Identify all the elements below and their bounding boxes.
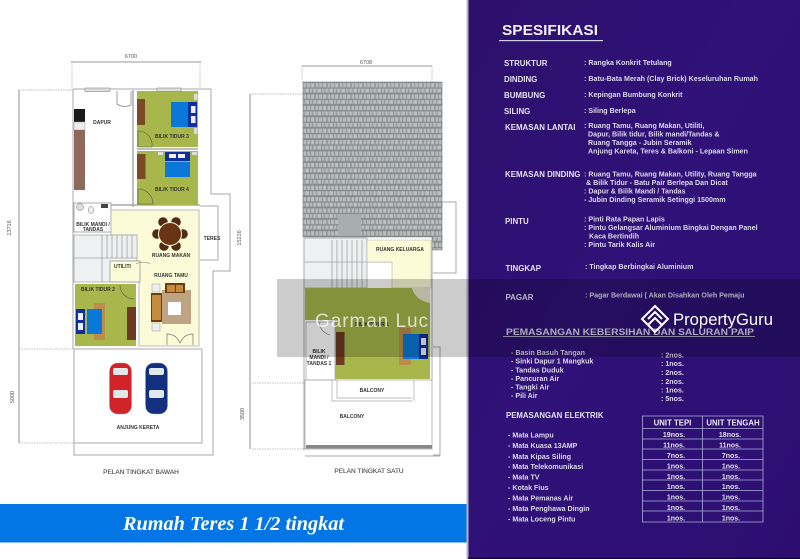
- spec: siling: [504, 107, 636, 116]
- room: bathroom: BILIK MANDI /: [76, 222, 110, 228]
- heading: pemasangan kebersihan: PEMASANGAN KEBERSIHAN DAN SALURAN PAIP: [506, 326, 754, 337]
- list: plumbing: : 2nos.: [661, 369, 684, 377]
- icon: blue car: [146, 363, 168, 414]
- spec: dinding: [504, 75, 758, 84]
- table: electrical units: 1nos.: [722, 484, 740, 491]
- watermark band: [277, 279, 800, 357]
- terrace outline: first floor: [433, 202, 456, 273]
- table: electrical units: 11nos.: [663, 442, 685, 450]
- list: plumbing: - Basin Basuh Tangan: [511, 349, 585, 357]
- spec: kemasan dinding: [505, 170, 757, 204]
- room: bedroom 4: BILIK TIDUR 4: [155, 187, 189, 193]
- table: electrical units: 7nos.: [722, 453, 740, 460]
- spec: kemasan dinding: : Dapur & Bilik Mandi / Tandas: [584, 188, 686, 196]
- spec: kemasan lantai: Ruang Tangga - Jubin Seramik: [588, 139, 692, 147]
- list: plumbing: : 5nos.: [661, 395, 684, 403]
- plan title: first floor: PELAN TINGKAT SATU: [334, 468, 404, 475]
- watermark: agent name: Garman Luc: [315, 311, 428, 332]
- room: bathroom first floor: BILIK: [312, 349, 326, 355]
- list: electrical: - Mata Pemanas Air: [508, 494, 573, 502]
- watermark: PropertyGuru logo: [642, 306, 773, 332]
- room: bedroom 3: BILIK TIDUR 3: [155, 134, 189, 140]
- outer boundary walls: [73, 89, 230, 455]
- spec: kemasan lantai: KEMASAN LANTAI: [505, 123, 575, 132]
- wall outline left: [72, 89, 74, 349]
- list: electrical: - Mata Loceng Pintu: [508, 516, 575, 524]
- list: electrical: - Mata Telekomunikasi: [508, 463, 583, 471]
- list: plumbing: : 1nos.: [661, 360, 684, 368]
- room: staircase first floor: [304, 238, 392, 288]
- room: bathroom first floor: TANDAS 1: [307, 361, 332, 367]
- spec: pintu: Kaca Bertindih: [589, 232, 639, 240]
- spec: bumbung: BUMBUNG: [504, 91, 545, 100]
- table: electrical units: 7nos.: [667, 453, 685, 460]
- dimension lines: first floor: 6708: [360, 60, 372, 66]
- icon: stacked diamonds: [642, 306, 668, 332]
- spec: pagar: [506, 292, 744, 302]
- table: electrical units: 18nos.: [719, 432, 741, 439]
- list: plumbing: : 2nos.: [661, 378, 684, 386]
- panel: ground floor plan: [7, 54, 243, 476]
- spec: siling: SILING: [504, 107, 530, 116]
- table: electrical units: 1nos.: [722, 505, 740, 512]
- spec: pagar: PAGAR: [506, 293, 534, 302]
- table: electrical units: [642, 416, 763, 522]
- list: plumbing: [511, 349, 684, 403]
- spec: tingkap: [506, 263, 693, 273]
- heading: pemasangan elektrik: PEMASANGAN ELEKTRIK: [506, 411, 604, 420]
- table: electrical units: 1nos.: [667, 464, 685, 470]
- spec: pintu: : Pintu Gelangsar Aluminium Bingkai Dengan Panel: [584, 224, 758, 232]
- spec: kemasan dinding: : Ruang Tamu, Ruang Makan, Utility, Ruang Tangga: [584, 170, 757, 178]
- balcony lower: BALCONY: [340, 414, 365, 420]
- panel: specification: [466, 0, 800, 559]
- room: bathroom first floor: [306, 322, 335, 380]
- dimension lines: first floor: [240, 60, 432, 449]
- list: plumbing: - Sinki Dapur 1 Mangkuk: [511, 358, 593, 366]
- balcony upper: BALCONY: [360, 388, 385, 394]
- room: ruang keluarga: [367, 240, 431, 288]
- balcony lower: [305, 380, 432, 449]
- room: bathroom: TANDAS: [83, 227, 104, 233]
- list: plumbing: : 2nos.: [661, 352, 684, 360]
- spec: siling: : Siling Berlepa: [584, 107, 636, 115]
- room: ruang keluarga: RUANG KELUARGA: [376, 247, 424, 253]
- title banner: [0, 504, 470, 542]
- list: electrical: - Mata Kipas Siling: [508, 453, 571, 461]
- table: electrical units: UNIT TENGAH: [706, 418, 760, 428]
- room: bedroom 2: [75, 284, 136, 346]
- room: car porch: ANJUNG KERETA: [117, 425, 160, 431]
- heading: spesifikasi: SPESIFIKASI: [502, 23, 598, 39]
- dimension lines: ground floor: 6700: [125, 54, 137, 60]
- list: plumbing: - Pancuran Air: [511, 375, 559, 383]
- roof tiles: [303, 82, 442, 250]
- terrace outline: [200, 206, 218, 260]
- spec: bumbung: : Kepingan Bumbung Konkrit: [584, 91, 683, 99]
- spec: dinding: DINDING: [504, 75, 537, 84]
- dimension lines: ground floor: [7, 54, 243, 443]
- room: bedroom 2: BILIK TIDUR 2: [81, 287, 115, 293]
- spec: kemasan lantai: Anjung Kareta, Teres & Balkoni - Lepaan Simen: [588, 148, 748, 156]
- spec: kemasan dinding: - Jubin Dinding Seramik Setinggi 1500mm: [584, 196, 726, 204]
- room: kitchen: [74, 88, 133, 205]
- spec: kemasan lantai: Dapur, Bilik tidur, Bilik mandi/Tandas &: [588, 130, 720, 138]
- spec: pagar: : Pagar Berdawai ( Akan Disahkan Oleh Pemaju: [585, 292, 744, 300]
- plan title: ground floor: PELAN TINGKAT BAWAH: [103, 469, 179, 476]
- spec: kemasan lantai: [505, 122, 748, 156]
- label: ruang tamu: RUANG TAMU: [154, 273, 188, 279]
- watermark: PropertyGuru logo: PropertyGuru: [673, 310, 773, 329]
- table: electrical units: 1nos.: [667, 494, 685, 502]
- table: electrical units: 1nos.: [722, 464, 740, 470]
- spec: kemasan lantai: : Ruang Tamu, Ruang Makan, Utiliti,: [584, 122, 704, 130]
- dimension lines: first floor: 3500: [240, 408, 246, 420]
- spec: pintu: : Pinti Rata Papan Lapis: [584, 216, 665, 224]
- room: car porch: [74, 349, 202, 443]
- spec: struktur: STRUKTUR: [504, 59, 548, 68]
- dimension lines: ground floor: 5000: [10, 391, 16, 403]
- list: electrical: - Kotak Fius: [508, 484, 549, 492]
- label: teres: TERES: [204, 236, 221, 242]
- spec: pintu: : Pintu Tarik Kalis Air: [584, 241, 655, 249]
- dimension lines: ground floor: 13716: [7, 220, 13, 236]
- list: plumbing: : 1nos.: [661, 386, 684, 394]
- spec: struktur: : Rangka Konkrit Tetulang: [584, 59, 672, 67]
- table: electrical units: 19nos.: [663, 432, 685, 439]
- title banner: Rumah Teres 1 1/2 tingkat: [122, 514, 345, 535]
- room: utility: UTILITI: [114, 264, 132, 270]
- list: electrical: - Mata Penghawa Dingin: [508, 505, 590, 513]
- list: electrical: [508, 432, 590, 524]
- list: electrical: - Mata TV: [508, 474, 540, 482]
- dining table: [152, 217, 188, 251]
- spec: kemasan dinding: & Bilik Tidur - Batu Pair Berlepa Dan Dicat: [586, 179, 728, 187]
- room: bathroom first floor: MANDI /: [309, 355, 329, 361]
- spec: bumbung: [504, 91, 683, 100]
- walls: first floor: [304, 238, 432, 450]
- spec: struktur: [504, 59, 672, 68]
- living room furniture: [151, 283, 193, 345]
- table: electrical units: 1nos.: [722, 494, 740, 502]
- roof skylight: [338, 214, 361, 236]
- spec: kemasan dinding: KEMASAN DINDING: [505, 170, 580, 179]
- list: plumbing: - Tandas Duduk: [511, 366, 564, 374]
- room: staircase: [74, 235, 137, 282]
- room: bathroom: [74, 203, 111, 233]
- table: electrical units: 1nos.: [667, 484, 685, 491]
- spec: tingkap: TINGKAP: [506, 264, 541, 273]
- list: electrical: - Mata Lampu: [508, 432, 554, 440]
- room: bedroom 3: [137, 88, 198, 147]
- side outline: first floor: [305, 347, 440, 456]
- table: electrical units: 1nos.: [722, 516, 740, 522]
- spec: tingkap: : Tingkap Berbingkai Aluminium: [585, 263, 693, 271]
- list: plumbing: - Pili Air: [511, 392, 538, 400]
- spec: pintu: PINTU: [505, 217, 529, 226]
- balcony upper: [332, 380, 414, 401]
- list: electrical: - Mata Kuasa 13AMP: [508, 442, 578, 450]
- table: electrical units: UNIT TEPI: [654, 418, 691, 428]
- dimension lines: ground floor: 15216: [237, 230, 243, 246]
- room: kitchen: DAPUR: [93, 120, 111, 126]
- table: electrical units: 1nos.: [667, 516, 685, 522]
- panel: first floor plan: [240, 60, 456, 475]
- room: master bedroom: BILIK TIDUR 1: [355, 322, 389, 328]
- wall between kitchen and rooms: [74, 90, 200, 207]
- room: bedroom 4: [137, 151, 198, 205]
- icon: red car: [110, 363, 132, 414]
- room: utility: [110, 261, 150, 282]
- label: ruang makan: RUANG MAKAN: [152, 253, 191, 259]
- room: dining and living area: [111, 210, 199, 346]
- spec: dinding: : Batu-Bata Merah (Clay Brick) Keseluruhan Rumah: [584, 75, 758, 83]
- table: electrical units: 11nos.: [719, 442, 741, 450]
- table: electrical units: 1nos.: [722, 474, 740, 481]
- room: master bedroom: [305, 288, 430, 379]
- list: plumbing: - Tangki Air: [511, 384, 549, 392]
- spec: pintu: [505, 216, 758, 249]
- table: electrical units: 1nos.: [667, 474, 685, 481]
- table: electrical units: 1nos.: [667, 505, 685, 512]
- kitchen counter: [74, 109, 85, 190]
